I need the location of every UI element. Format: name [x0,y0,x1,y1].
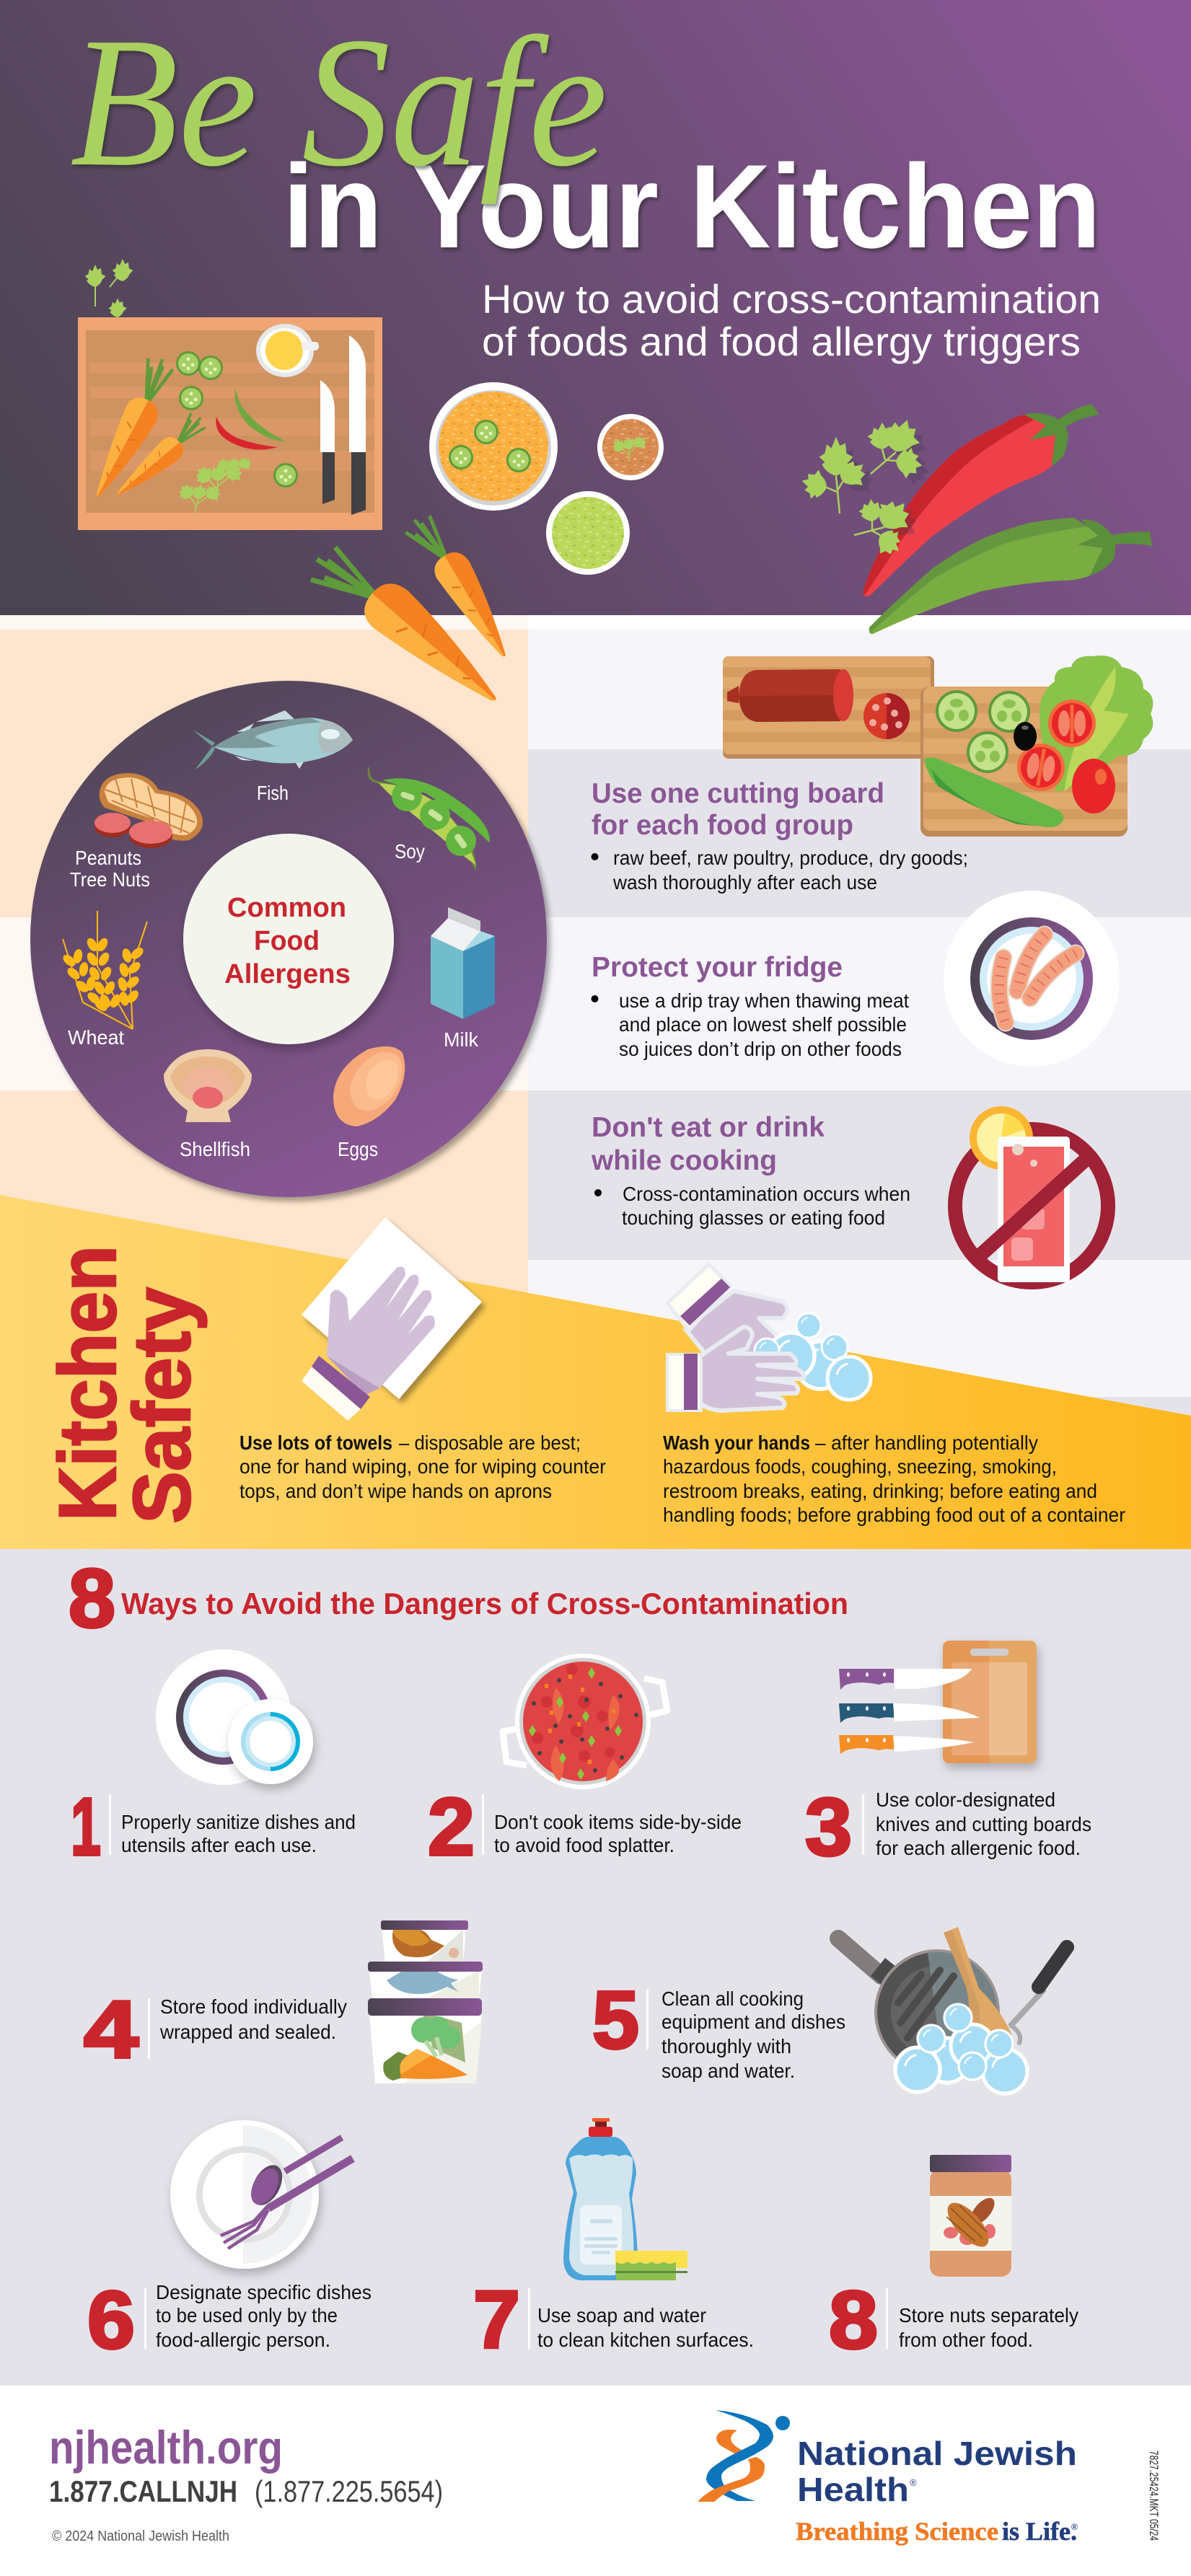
subtitle: How to avoid cross-contamination [482,276,1101,322]
text: fridge bullet: so juices don’t drip on other foods [619,1038,902,1060]
step 7 [473,2118,754,2365]
text: step 8: from other food. [899,2329,1033,2351]
step 4 [84,1920,483,2083]
text: don't eat bullet [594,1183,910,1229]
logo: National Jewish Health [797,2435,1077,2508]
icon: plate with sausages [944,891,1120,1067]
heading: don't eat: while cooking [591,1145,777,1176]
icon: pan and bubbles [838,1927,1067,2094]
label: Milk: Milk [444,1028,479,1051]
panel: protect your fridge [592,891,1120,1067]
number 7: 7 [473,2274,520,2365]
icon: carrots [304,506,520,723]
text: step 7: to clean kitchen surfaces. [537,2329,754,2351]
footer [0,2386,1191,2576]
text: use lots of towels: Use lots of towels [239,1432,392,1454]
heading: Kitchen Safety: Kitchen [43,1245,133,1521]
icon: small bowl spice [597,414,664,480]
text: step 3: knives and cutting boards [876,1813,1091,1835]
heading: Kitchen Safety: Safety [117,1287,207,1524]
icon: washing hands [667,1264,871,1411]
logo: tagline: ® [1071,2522,1078,2532]
text: step 3 [876,1788,1091,1859]
icon: no drink sign [955,1106,1108,1282]
label: Peanuts Tree Nuts [70,847,150,891]
step 8 [829,2155,1078,2365]
icon: parsley sprigs [798,413,933,562]
text: don't eat bullet: Cross-contamination occurs when [623,1183,910,1205]
icon: wheat [61,911,147,1029]
step 1 [71,1649,356,1872]
text: cutting board bullet [592,847,968,894]
heading: fridge: Protect your fridge [592,952,843,983]
allergens heading: Food [254,926,320,956]
heading: 8 Ways [69,1553,848,1645]
text: step 3: Use color-designated [876,1788,1055,1811]
text: cutting board bullet: wash thoroughly after each use [612,871,877,894]
icon: knives and board [839,1641,1037,1763]
label: Soy: Soy [395,840,425,863]
text: wash your hands [663,1432,1125,1526]
text: fridge bullet: and place on lowest shelf possible [619,1013,907,1036]
icon: soy pod [368,767,490,871]
text: use lots of towels [239,1432,606,1502]
number 3: 3 [805,1781,852,1872]
text: step 6: Designate specific dishes [156,2281,372,2303]
footer: job code: 7827.25424.MKT 05/24 [1147,2451,1161,2541]
text: step 4: wrapped and sealed. [159,2021,336,2043]
label: Eggs: Eggs [338,1138,378,1160]
text: step 1 [121,1811,356,1856]
icon: towel and glove [302,1217,482,1421]
label: Peanuts Tree Nuts: Tree Nuts [70,868,150,891]
icon: produce board [920,656,1153,837]
icon: plates [156,1649,313,1785]
icon: nut jar [930,2155,1011,2277]
icon: peanut and almonds [95,773,203,848]
text: step 2 [494,1811,742,1856]
title: Be Safe: Be Safe [70,0,607,205]
icon: parsley above board [85,259,136,335]
text: step 5: Clean all cooking [662,1988,804,2010]
icon: green chili pepper [869,518,1152,634]
icon: egg [333,1046,405,1126]
heading: don't eat: Don't eat or drink [592,1112,825,1143]
text: use lots of towels: tops, and don’t wipe hands on aprons [239,1480,552,1502]
text: fridge bullet: use a drip tray when thawing meat [619,989,909,1012]
footer: phone [49,2474,443,2508]
icon: soap bottle and sponge [563,2118,687,2280]
allergens heading: Allergens [224,959,351,989]
text: step 5 [662,1988,845,2082]
text: wash your hands: hazardous foods, coughing, sneezing, smoking, [663,1455,1057,1478]
text: step 8 [899,2304,1078,2351]
icon: shell [164,1049,252,1122]
number 8: 8 [829,2275,878,2365]
text: wash your hands: restroom breaks, eating, drinking; before eating and [663,1480,1097,1502]
footer: website: njhealth.org [49,2421,283,2474]
heading: 8 Ways: 8 [69,1553,115,1645]
text: step 7: Use soap and water [537,2304,706,2326]
heading: don't eat [591,1112,825,1176]
text: step 6 [156,2281,372,2351]
number 4: 4 [84,1984,139,2075]
footer: phone: (1.877.225.5654) [255,2474,443,2508]
number 5: 5 [592,1975,639,2065]
text: step 4 [159,1995,347,2043]
logo: helix [698,2410,790,2502]
allergens heading [224,893,351,989]
logo: tagline: Breathing Science [796,2517,998,2546]
logo: tagline: is Life. [1002,2517,1077,2546]
footer: copyright: © 2024 National Jewish Health [52,2528,229,2544]
panel: cutting board tip [592,656,1153,894]
label: Wheat: Wheat [68,1026,124,1049]
text: step 2: Don't cook items side-by-side [494,1811,742,1833]
heading: cutting board: for each food group [592,810,853,841]
icon: red chili pepper [863,404,1099,596]
number 6: 6 [87,2275,135,2365]
subtitle [482,276,1101,364]
heading: Kitchen Safety [43,1245,207,1524]
icon: fish [193,710,353,770]
text: step 5: thoroughly with [662,2035,791,2057]
heading: cutting board: Use one cutting board [592,778,884,809]
text: don't eat bullet: touching glasses or eating food [622,1207,885,1229]
icon: milk carton [431,907,495,1019]
text: fridge bullet [592,989,909,1060]
step 6 [87,2120,372,2365]
step 5 [592,1927,1067,2094]
label: Shellfish: Shellfish [180,1138,250,1160]
step 3 [805,1641,1091,1872]
text: wash your hands: handling foods; before grabbing food out of a container [663,1504,1125,1526]
title: in Your Kitchen: in Your Kitchen [283,140,1101,273]
logo: National Jewish Health: ® [910,2477,917,2488]
icon: green bowl [546,491,630,575]
subtitle: of foods and food allergy triggers [482,319,1081,364]
icon: plate with spoon and fork [170,2120,353,2269]
number 1: 1 [71,1781,101,1872]
text: step 6: food-allergic person. [156,2329,330,2351]
allergens heading: Common [227,893,346,923]
text: use lots of towels: one for hand wiping, one for wiping counter [239,1455,606,1478]
text: step 4: Store food individually [160,1995,347,2018]
heading: 8 Ways: Ways to Avoid the Dangers of Cross-Contamination [121,1587,848,1620]
text: step 2: to avoid food splatter. [494,1834,674,1856]
step 2 [428,1654,742,1872]
text: step 8: Store nuts separately [899,2304,1078,2326]
icon: large bowl [429,382,558,511]
number 2: 2 [428,1781,475,1872]
text: wash your hands: – after handling potentially [815,1432,1038,1454]
text: step 6: to be used only by the [156,2304,338,2326]
panel: 8 ways [0,1549,1191,2386]
text: use lots of towels: – disposable are best; [399,1432,581,1454]
text: step 7 [537,2304,754,2351]
logo: National Jewish Health: Health [797,2471,909,2508]
icon: food containers [368,1920,483,2083]
icon: cutting board with vegetables [78,317,382,530]
text: step 5: soap and water. [662,2060,795,2082]
label: Fish: Fish [257,782,289,804]
text: cutting board bullet: raw beef, raw poultry, produce, dry goods; [613,847,968,869]
logo: National Jewish Health: National Jewish [797,2435,1077,2472]
chart: allergen wheel [30,681,547,1197]
text: step 5: equipment and dishes [662,2011,845,2033]
heading: cutting board [592,778,884,841]
icon: pot [503,1654,667,1789]
text: step 1: Properly sanitize dishes and [121,1811,356,1833]
text: step 1: utensils after each use. [121,1834,317,1856]
footer: phone: 1.877.CALLNJH [49,2474,237,2508]
panel: kitchen safety [0,1195,1191,1549]
label: Peanuts Tree Nuts: Peanuts [75,847,141,869]
panel: header [0,0,1191,634]
text: step 3: for each allergenic food. [876,1837,1081,1859]
text: wash your hands: Wash your hands [663,1432,810,1454]
icon: salami board [723,656,934,759]
panel: don't eat or drink [591,1106,1108,1282]
